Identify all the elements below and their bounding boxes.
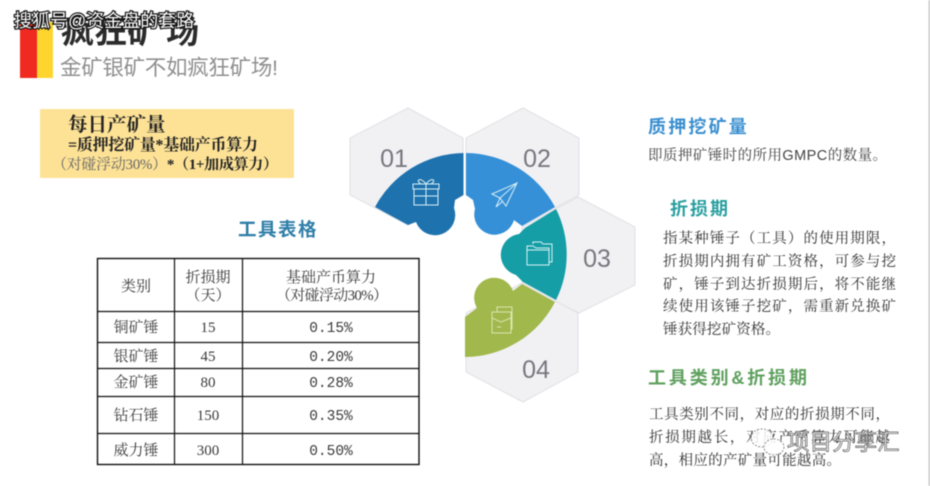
- heading: tool types: 工具类别&折损期: [648, 368, 807, 388]
- tool table: 钻石锤: [113, 407, 159, 424]
- tool table: （天）: [185, 287, 231, 304]
- tool table: 类别: [121, 277, 151, 295]
- tool table: [98, 258, 419, 464]
- tool table: 基础产币算力: [286, 268, 376, 286]
- tool table: 金矿锤: [113, 374, 159, 391]
- segment 04: [465, 278, 555, 357]
- tool table: 300: [197, 443, 219, 459]
- icon: document: [492, 307, 512, 333]
- segment 01: [375, 153, 464, 235]
- tool table: 80: [200, 375, 216, 391]
- source watermark: 搜狐号@资金盘的套路: [14, 11, 194, 31]
- formula box: 每日产矿量: [68, 113, 166, 136]
- icon: gift: [413, 180, 439, 205]
- tool table: 威力锤: [113, 442, 159, 459]
- text: tool types: 折损期越长，对应产币算力可能越: [649, 429, 890, 446]
- text: depreciation: 矿，锤子到达折损期后，将不能继: [663, 276, 896, 293]
- icon: paper plane: [492, 183, 517, 207]
- text: depreciation: [663, 229, 896, 338]
- formula box: =质押挖矿量*基础产币算力: [68, 135, 258, 154]
- hexagon 02: [466, 108, 579, 225]
- table heading: 工具表格: [238, 219, 318, 240]
- tool table: 铜矿锤: [113, 319, 159, 336]
- title: 疯狂矿场: [61, 13, 199, 50]
- tool table: 折损期: [185, 269, 231, 286]
- tool table: 150: [197, 408, 219, 424]
- wechat watermark: 项目分享汇: [787, 430, 900, 455]
- hexagon 01: 01: [380, 145, 408, 173]
- tool table: 0.20%: [309, 350, 353, 366]
- text: depreciation: 折损期内拥有矿工资格，可参与挖: [663, 252, 896, 270]
- subtitle: 金矿银矿不如疯狂矿场!: [60, 56, 278, 80]
- text: depreciation: 指某种锤子（工具）的使用期限，: [663, 229, 896, 247]
- hexagon 03: 03: [583, 245, 611, 273]
- accent bars: [20, 22, 53, 78]
- segment 03: [501, 209, 567, 300]
- text: tool types: 高，相应的产矿量可能越高。: [649, 451, 841, 469]
- tool table: （对碰浮动30%）: [276, 287, 388, 304]
- heading: depreciation: 折损期: [670, 199, 730, 219]
- tool table: 45: [200, 349, 216, 365]
- tool table: 银矿锤: [113, 348, 159, 365]
- formula box: [40, 109, 294, 178]
- tool table: 0.35%: [309, 409, 353, 425]
- tool table: 15: [200, 320, 216, 336]
- text: pledge amount: 即质押矿锤时的所用GMPC的数量。: [648, 147, 887, 164]
- text: tool types: [649, 405, 890, 469]
- text: tool types: 工具类别不同，对应的折损期不同，: [649, 405, 890, 423]
- segment 02: [466, 153, 555, 235]
- text: depreciation: 锤获得挖矿资格。: [663, 320, 780, 338]
- hexagon 02: 02: [523, 145, 551, 173]
- text: depreciation: 续使用该锤子挖矿，需重新兑换矿: [663, 298, 896, 315]
- tool table: 0.50%: [309, 444, 353, 460]
- icon: folder: [527, 242, 552, 265]
- hexagon 04: 04: [522, 356, 550, 384]
- tool table: 0.15%: [309, 321, 353, 337]
- tool table: 0.28%: [309, 376, 353, 392]
- hexagon 04: [466, 283, 578, 402]
- heading: pledge amount: 质押挖矿量: [648, 116, 749, 137]
- hexagon 01: [350, 108, 463, 225]
- formula box: （对碰浮动30%）*（1+加成算力）: [52, 155, 278, 173]
- hexagon 03: [522, 197, 635, 313]
